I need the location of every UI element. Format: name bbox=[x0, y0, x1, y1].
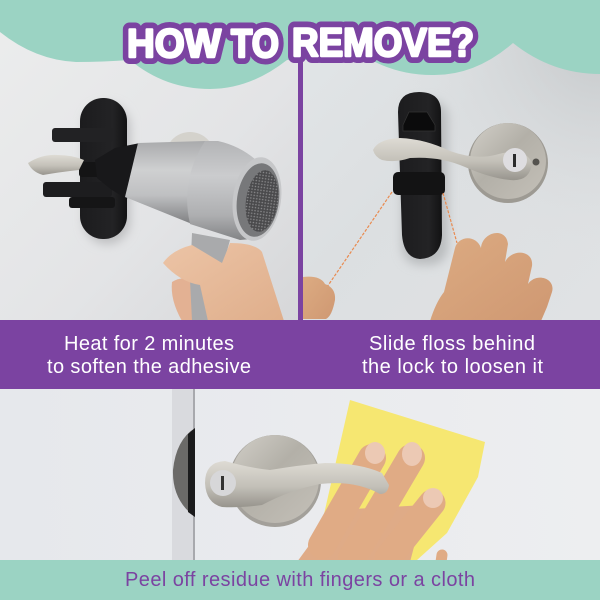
icon: yellow cloth bbox=[322, 400, 485, 560]
icon: lock on door edge bbox=[173, 428, 195, 517]
caption: floss step: Slide floss behind bbox=[369, 333, 535, 355]
icon: door rose behind dryer bbox=[166, 132, 214, 178]
icon: hand holding dryer bbox=[163, 243, 284, 321]
icon: left fingers bbox=[303, 277, 335, 319]
title: TO bbox=[231, 22, 279, 66]
caption: floss step: the lock to loosen it bbox=[362, 356, 543, 378]
title: REMOVE? bbox=[292, 21, 474, 65]
title bbox=[127, 21, 474, 66]
panel: heat with hair dryer photo bbox=[0, 0, 298, 322]
icon: door knob and lever bbox=[205, 435, 389, 527]
panel: floss photo bbox=[303, 0, 600, 321]
title: HOW bbox=[127, 22, 221, 66]
caption: heat step: Heat for 2 minutes bbox=[64, 333, 234, 355]
title: HOW bbox=[127, 22, 221, 66]
icon: door lever bbox=[28, 155, 84, 175]
vertical divider bbox=[298, 60, 303, 322]
icon: door lock plate bbox=[43, 98, 130, 244]
icon: orange floss bbox=[327, 192, 457, 287]
icon: door knob and key lever bbox=[373, 123, 548, 203]
band: teal footer caption bbox=[0, 560, 600, 600]
caption: heat step: to soften the adhesive bbox=[47, 356, 251, 378]
caption: peel step: Peel off residue with fingers or a cloth bbox=[125, 569, 475, 591]
icon: lock with hinge bbox=[393, 92, 448, 265]
band: purple captions bbox=[0, 320, 600, 389]
icon: hand wiping bbox=[297, 442, 443, 562]
title: REMOVE? bbox=[292, 21, 474, 65]
icon: right hand bbox=[430, 233, 553, 321]
door edge bbox=[172, 389, 195, 560]
icon: hair dryer bbox=[95, 141, 287, 322]
title: TO bbox=[231, 22, 279, 66]
teal scalloped header bbox=[0, 0, 600, 89]
panel: wipe with cloth photo bbox=[0, 389, 600, 562]
